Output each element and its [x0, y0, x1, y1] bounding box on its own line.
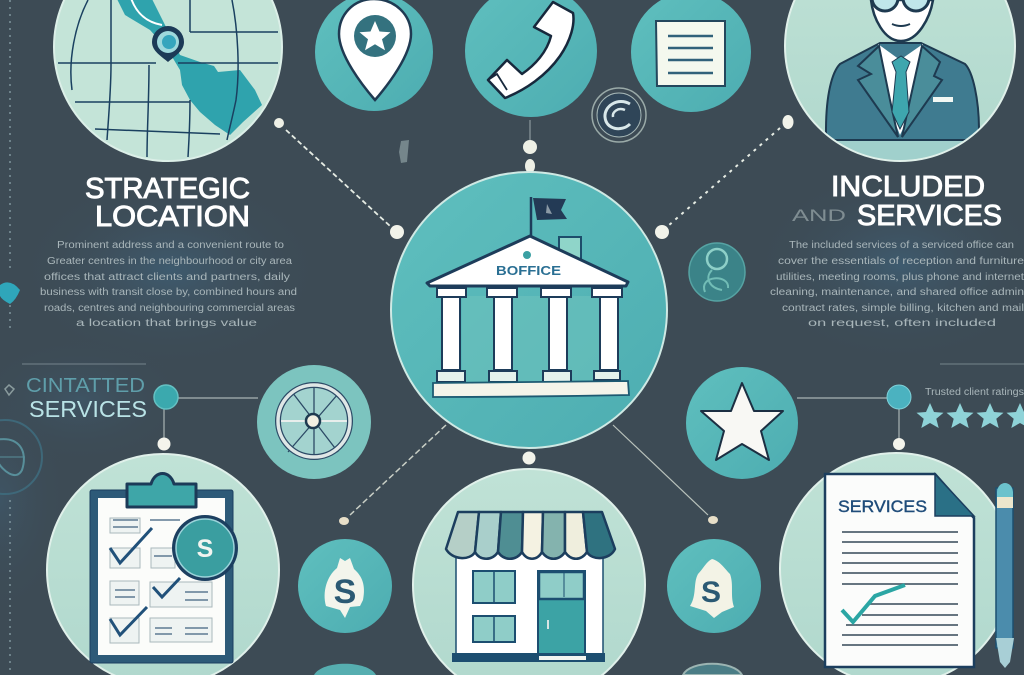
glasses	[872, 0, 898, 11]
heading: strategic location: LOCATION	[95, 201, 250, 233]
icon: partial circle bottom right	[683, 664, 742, 675]
connector: top to office	[523, 120, 537, 173]
heading: included services: AND	[792, 206, 846, 225]
door	[538, 571, 585, 655]
panel: wheel icon	[257, 365, 371, 479]
dollar badge	[172, 515, 238, 581]
face	[871, 0, 933, 41]
office label: BOFFICE	[496, 264, 561, 278]
connector: lower left	[339, 425, 446, 525]
heading: strategic location: STRATEGIC	[85, 173, 250, 205]
icon: swirl seal	[592, 88, 646, 142]
panel: dollar icon right	[667, 539, 761, 633]
text block: strategic location description: Prominent address and a convenient route to	[57, 240, 284, 251]
heading: included services	[792, 171, 1002, 232]
text block: included services description: cleaning, maintenance, and shared office admin	[770, 287, 1024, 298]
text: rating caption: Trusted client ratings	[925, 387, 1024, 398]
heading: included services: SERVICES	[857, 200, 1002, 232]
chimney	[559, 237, 581, 263]
icon: faint swirl	[0, 420, 42, 494]
document lines	[842, 532, 958, 645]
icon: teal swirl medallion	[689, 243, 745, 301]
desk	[836, 140, 964, 160]
panel: services document	[780, 453, 1014, 675]
windows	[473, 571, 515, 603]
heading: included services: INCLUDED	[831, 171, 985, 203]
heading: contacted services	[26, 375, 147, 422]
icon: teal marker	[0, 282, 20, 304]
awning	[446, 512, 615, 559]
panel: dollar icon left: S	[334, 573, 356, 611]
text block: included services description: contract rates, simple billing, kitchen and mail	[782, 303, 1024, 314]
panel: central office building	[391, 172, 667, 448]
panel: telephone icon	[465, 0, 597, 117]
text block: strategic location description: a location that brings value	[76, 318, 258, 329]
clip	[127, 474, 196, 507]
tie	[892, 56, 910, 129]
panel: document icon	[631, 0, 751, 112]
text block: included services description: The included services of a serviced office can	[789, 240, 1014, 251]
pencil	[996, 483, 1014, 668]
panel: location pin icon	[315, 0, 433, 111]
connector: office to store	[522, 452, 536, 464]
panel: professional person	[785, 0, 1015, 170]
roof	[427, 236, 628, 286]
flag	[530, 197, 532, 238]
text block: strategic location description: offices that attract clients and partners, daily	[44, 272, 290, 283]
platform	[433, 381, 629, 397]
heading: strategic location	[85, 173, 250, 233]
connector: contacted services node	[154, 385, 258, 450]
text block: included services description: on request, often included	[808, 318, 996, 329]
map pin	[152, 26, 184, 62]
text block: strategic location description: roads, centres and neighbouring commercial areas	[44, 303, 295, 314]
connector: lower right	[613, 425, 718, 524]
connector: person to office	[655, 115, 794, 239]
interior shade	[462, 296, 600, 382]
panel: checklist	[47, 454, 279, 675]
text block: included services description: cover the essentials of reception and furniture	[778, 256, 1024, 267]
panel: store	[413, 469, 645, 675]
panel: dollar icon right: S	[701, 576, 721, 609]
icon: faint mark	[399, 140, 409, 163]
heading: contacted services: CINTATTED	[26, 375, 145, 397]
connector: map to office	[274, 118, 404, 239]
columns	[437, 288, 622, 382]
panel: dollar icon left	[298, 539, 392, 633]
connector: rating node	[797, 385, 911, 450]
text block: included services description: utilities, meeting rooms, plus phone and internet	[776, 272, 1024, 283]
text block: strategic location description: Greater centres in the neighbourhood or city area	[47, 256, 292, 267]
rating stars	[916, 403, 1024, 428]
check mark	[842, 585, 905, 622]
shirt	[878, 44, 923, 135]
icon: small diamond marker	[5, 385, 14, 395]
text block: strategic location description: business with transit close by, combined hours and	[40, 287, 297, 298]
icon: partial circle bottom left	[314, 664, 376, 675]
panel: star icon	[686, 367, 798, 479]
suit	[826, 43, 979, 140]
heading: contacted services: SERVICES	[29, 396, 147, 422]
panel: strategic location map	[54, 0, 282, 161]
document heading: SERVICES	[838, 497, 927, 516]
text block: strategic location description	[40, 240, 297, 329]
map landmass	[115, 0, 262, 135]
panel: checklist: S	[197, 535, 213, 563]
text block: included services description	[770, 240, 1024, 329]
